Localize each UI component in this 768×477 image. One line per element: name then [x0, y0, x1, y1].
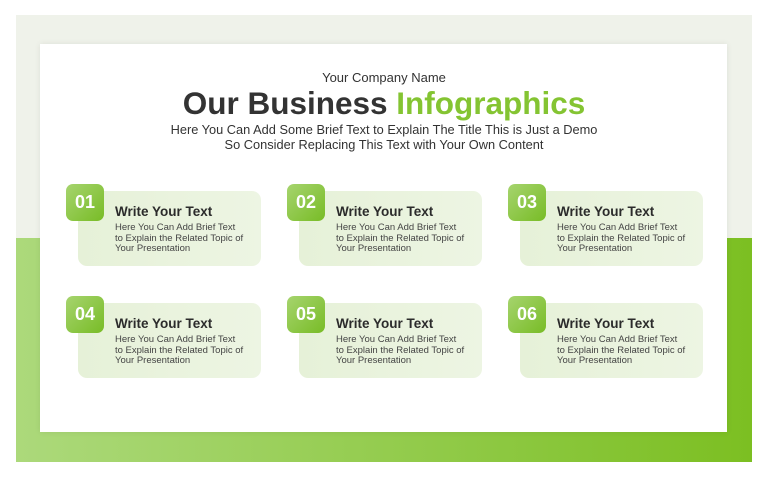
subtitle: So Consider Replacing This Text with Your Own Content — [225, 136, 543, 152]
item 05: to Explain the Related Topic of — [336, 344, 464, 356]
item 06: Write Your Text — [557, 316, 654, 331]
item 06: 06 — [517, 304, 537, 324]
item 06: to Explain the Related Topic of — [557, 344, 685, 356]
item 01 — [66, 184, 261, 266]
item 02: Here You Can Add Brief Text — [336, 222, 456, 233]
item 04: Write Your Text — [115, 316, 212, 331]
item 06 — [508, 296, 703, 378]
subtitle: Here You Can Add Some Brief Text to Explain The Title This is Just a Demo — [171, 122, 597, 137]
item 04: Your Presentation — [115, 355, 190, 366]
subtitle — [171, 122, 597, 152]
item 03 — [508, 184, 703, 266]
item 02: Your Presentation — [336, 243, 411, 254]
item 01: 01 — [75, 192, 95, 212]
item 05: Write Your Text — [336, 316, 433, 331]
item 01: to Explain the Related Topic of — [115, 232, 243, 244]
item 01: Here You Can Add Brief Text — [115, 222, 235, 233]
item 05 — [287, 296, 482, 378]
green base band — [16, 238, 752, 462]
item 01: Your Presentation — [115, 243, 190, 254]
item 05: 05 — [296, 304, 316, 324]
item 02: to Explain the Related Topic of — [336, 232, 464, 244]
item 01: Write Your Text — [115, 204, 212, 219]
white panel — [40, 44, 727, 432]
item 05: Here You Can Add Brief Text — [336, 334, 456, 345]
item 04: to Explain the Related Topic of — [115, 344, 243, 356]
item 03: 03 — [517, 192, 537, 212]
item 03: Write Your Text — [557, 204, 654, 219]
item 06: Here You Can Add Brief Text — [557, 334, 677, 345]
item 06: Your Presentation — [557, 355, 632, 366]
company name: Your Company Name — [322, 70, 446, 85]
item 02 — [287, 184, 482, 266]
item 02: Write Your Text — [336, 204, 433, 219]
item 04 — [66, 296, 261, 378]
item 04: Here You Can Add Brief Text — [115, 334, 235, 345]
item 02: 02 — [296, 192, 316, 212]
item 03: Here You Can Add Brief Text — [557, 222, 677, 233]
item 03: to Explain the Related Topic of — [557, 232, 685, 244]
item 03: Your Presentation — [557, 243, 632, 254]
item 05: Your Presentation — [336, 355, 411, 366]
item 04: 04 — [75, 304, 95, 324]
title: Our Business Infographics — [183, 85, 585, 121]
